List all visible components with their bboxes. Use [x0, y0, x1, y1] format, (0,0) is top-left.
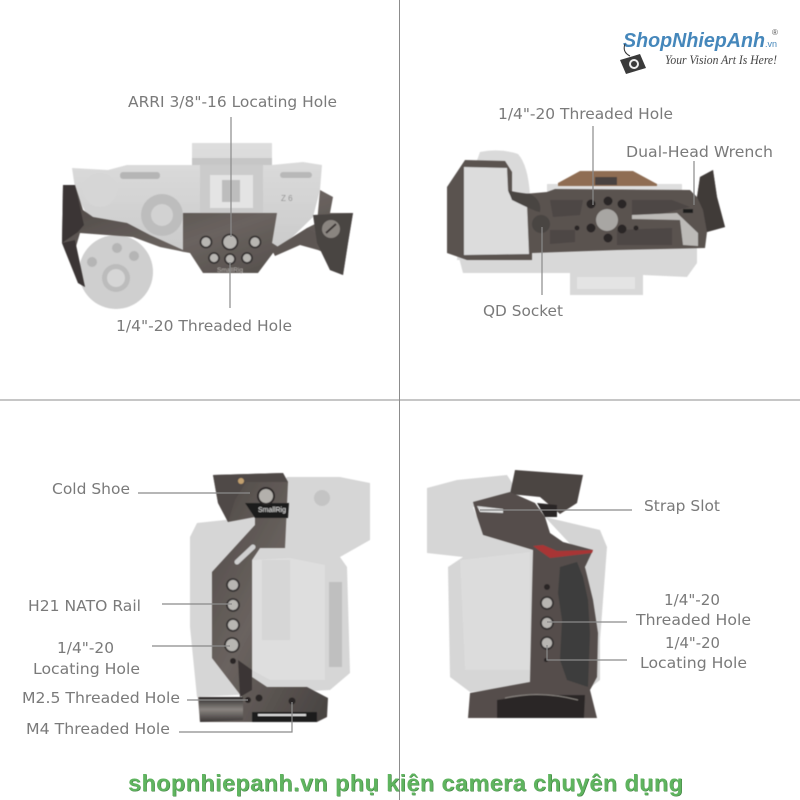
- footer slogan: shopnhiepanh.vn phụ kiện camera chuyên dụng: [129, 771, 684, 797]
- cage, left side: SmallRig: [258, 507, 286, 514]
- panel: top view of cage on camera: [62, 93, 353, 335]
- footer slogan: shopnhiepanh.vn phụ kiện camera chuyên dụng: [128, 770, 683, 796]
- logo wordmark: ShopNhiepAnh: [623, 30, 765, 52]
- label: top threaded hole: 1/4"-20 Threaded Hole: [116, 317, 292, 335]
- label: right locating hole: 1/4"-20: [665, 634, 720, 652]
- leader line: right locating hole: [547, 645, 627, 660]
- logo: ShopNhiepAnh: [620, 28, 778, 74]
- leader line: bottom threaded hole: [592, 126, 594, 205]
- leader line: strap slot: [480, 509, 632, 511]
- leader line: dual-head wrench: [693, 161, 695, 205]
- label: ARRI locating hole: ARRI 3/8"-16 Locating Hole: [128, 93, 337, 111]
- panel: bottom view of cage on camera: [447, 105, 773, 320]
- camera body, top view: [72, 143, 322, 309]
- cage, right side: [468, 470, 598, 718]
- leader line: top threaded hole: [229, 262, 231, 308]
- leader line: M2.5 hole: [187, 699, 248, 701]
- leader line: cold shoe: [138, 492, 250, 494]
- cage, bottom view: [447, 160, 725, 260]
- panel: left side view of cage: [22, 473, 370, 738]
- label: QD socket: QD Socket: [483, 302, 563, 320]
- camera body, bottom view: [457, 150, 697, 295]
- leader line: right threaded hole: [547, 621, 627, 623]
- leader line: locating hole: [152, 645, 230, 647]
- camera body, left side: [190, 477, 370, 697]
- logo tagline: Your Vision Art Is Here!: [665, 52, 777, 67]
- label: M2.5 hole: M2.5 Threaded Hole: [22, 689, 180, 707]
- cage, left side: [198, 473, 328, 722]
- logo domain suffix: .vn: [765, 39, 777, 49]
- panel: right side view of cage: [427, 470, 751, 718]
- leader line: QD socket: [541, 227, 543, 295]
- logo registered mark: ®: [772, 28, 778, 37]
- icon: camera: [620, 44, 646, 74]
- label: right threaded hole: 1/4"-20: [664, 591, 720, 609]
- label: M4 hole: M4 Threaded Hole: [26, 720, 170, 738]
- camera body, top view: Z 6: [281, 194, 293, 203]
- camera body, right side: [427, 475, 607, 692]
- wooden lens edge: [558, 171, 657, 186]
- label: locating hole: 1/4"-20: [57, 639, 114, 657]
- label: locating hole: Locating Hole: [33, 660, 140, 678]
- cage, top view: SmallRig: [217, 267, 243, 274]
- label: dual-head wrench: Dual-Head Wrench: [626, 143, 773, 161]
- leader line: ARRI locating hole: [230, 117, 232, 237]
- label: strap slot: Strap Slot: [644, 497, 720, 515]
- leader line: M4 hole: [179, 702, 292, 732]
- label: right threaded hole: Threaded Hole: [635, 611, 751, 629]
- label: right locating hole: Locating Hole: [640, 654, 747, 672]
- label: NATO rail: H21 NATO Rail: [28, 597, 141, 615]
- cage, top view: [62, 185, 353, 287]
- leader line: NATO rail: [162, 603, 232, 605]
- label: cold shoe: Cold Shoe: [52, 480, 130, 498]
- label: bottom threaded hole: 1/4"-20 Threaded Hole: [498, 105, 673, 123]
